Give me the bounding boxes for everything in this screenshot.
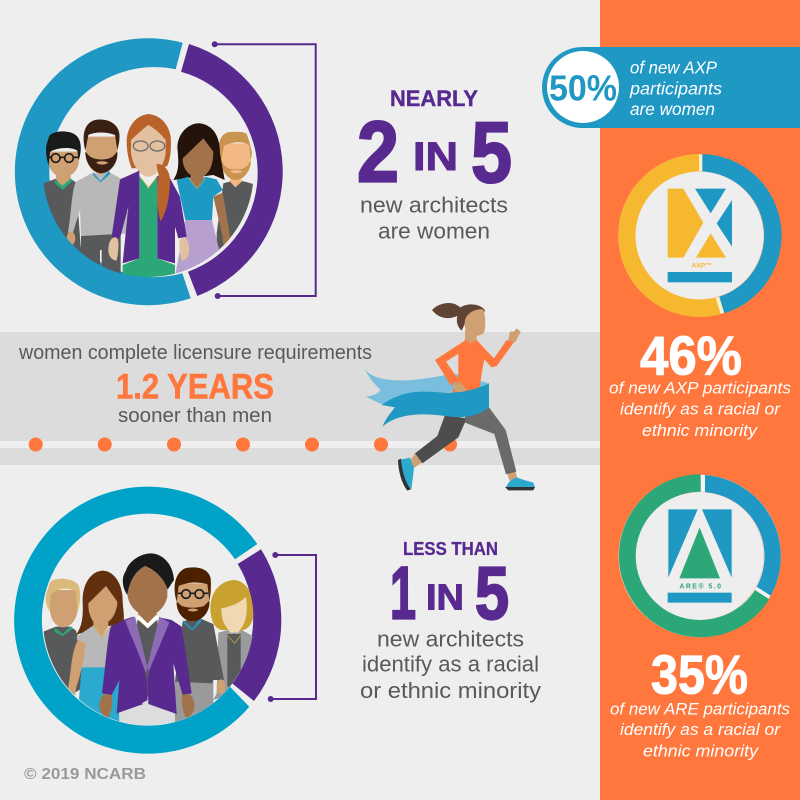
runner arms	[435, 339, 514, 386]
heading: less than 1 in 5: IN	[426, 576, 464, 617]
heading: less than 1 in 5: identify as a racial	[362, 652, 539, 677]
ribbon back	[365, 369, 489, 405]
copyright: © 2019 NCARB	[24, 766, 146, 783]
callout: 50 percent banner: are women	[630, 99, 715, 119]
heading: less than 1 in 5: or ethnic minority	[360, 678, 542, 703]
icon: ARE logo: ARE® 5.0	[679, 582, 721, 590]
person: man in purple blazer	[99, 553, 194, 737]
runner head and hair	[432, 303, 485, 343]
person: man with blond hair at right	[217, 132, 257, 253]
text: licensure statistic	[18, 341, 372, 427]
person: woman with brown hair	[68, 571, 124, 727]
heading: nearly 2 in 5: are women	[378, 218, 490, 243]
person: red-haired woman in purple jacket	[108, 114, 189, 280]
runner legs	[398, 407, 535, 491]
heading: less than 1 in 5: 1	[390, 551, 416, 634]
donut chart: ARE 35 percent	[619, 474, 781, 637]
heading: nearly 2 in 5	[357, 86, 512, 243]
text: licensure statistic: 1.2 YEARS	[116, 367, 274, 406]
stat: 46 percent: ethnic minority	[642, 421, 759, 440]
panel: orange sidebar	[600, 0, 800, 800]
icon: AXP logo	[668, 189, 732, 282]
donut chart: less than 1 in 5 minority	[14, 487, 281, 754]
callout: 50 percent banner: of new AXP	[630, 57, 717, 77]
stat: 46 percent: of new AXP participants	[609, 378, 791, 397]
text: licensure statistic: women complete licensure requirements	[18, 341, 372, 364]
heading: less than 1 in 5	[360, 539, 542, 703]
panel: licensure band	[0, 332, 600, 465]
heading: less than 1 in 5: LESS THAN	[403, 539, 498, 559]
stat: 35 percent: of new ARE participants	[610, 699, 790, 718]
donut chart: AXP 46 percent	[618, 154, 782, 317]
heading: less than 1 in 5: new architects	[377, 627, 524, 652]
person: blond man	[44, 578, 82, 694]
illustration: runner breaking ribbon	[365, 303, 535, 491]
bracket: minority share	[269, 553, 316, 701]
ribbon front	[382, 383, 489, 427]
person: man with round glasses	[43, 131, 82, 260]
runner torso	[451, 339, 486, 397]
person: bearded man in grey sweater	[67, 119, 131, 277]
person: woman with golden hair	[210, 580, 254, 700]
icon: ARE logo	[668, 509, 732, 603]
callout: 50 percent banner	[542, 47, 800, 128]
callout: 50 percent banner: participants	[629, 78, 722, 98]
heading: nearly 2 in 5: new architects	[360, 193, 508, 218]
heading: less than 1 in 5: 5	[475, 552, 509, 635]
stat: 35 percent: 35%	[651, 643, 748, 705]
bracket: women share	[213, 42, 316, 298]
donut chart: 2 in 5 women	[15, 38, 283, 305]
heading: nearly 2 in 5: 2	[357, 105, 399, 201]
illustration: group led by man of colour	[43, 553, 254, 737]
runner hands	[453, 328, 521, 393]
heading: nearly 2 in 5: 5	[471, 105, 512, 201]
stat: 46 percent	[609, 324, 791, 440]
callout: 50 percent banner: 50%	[549, 68, 617, 109]
stat: 35 percent: ethnic minority	[643, 742, 760, 761]
stat: 35 percent: identify as a racial or	[620, 720, 781, 739]
icon: AXP logo: AXP™	[691, 262, 712, 269]
timeline dots	[29, 438, 457, 452]
stat: 46 percent: 46%	[640, 324, 742, 386]
stat: 35 percent	[610, 643, 790, 761]
person: bearded man with round glasses	[175, 567, 225, 723]
illustration: group led by women	[43, 114, 257, 280]
person: woman in blue top	[173, 123, 231, 277]
heading: nearly 2 in 5: NEARLY	[390, 86, 478, 111]
heading: nearly 2 in 5: IN	[413, 135, 458, 179]
stat: 46 percent: identify as a racial or	[620, 399, 781, 418]
text: licensure statistic: sooner than men	[118, 404, 272, 427]
